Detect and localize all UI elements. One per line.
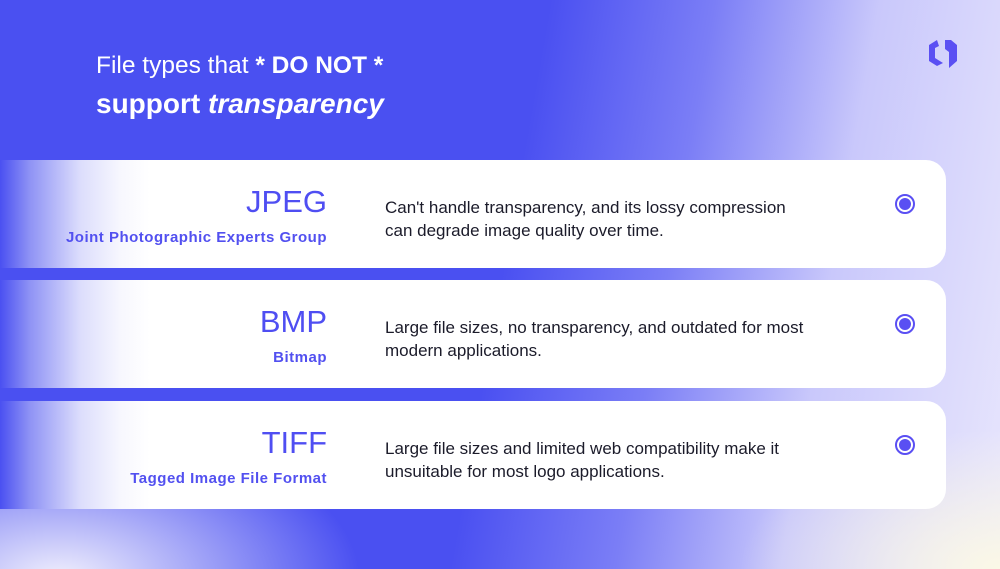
- heading: TIFF: TIFF: [262, 425, 327, 460]
- heading: BMP: BMP: [260, 304, 327, 339]
- icon: radio: [895, 314, 915, 334]
- text block: Large file sizes, no transparency, and outdated for most modern applications.: [385, 318, 803, 360]
- subtitle: Joint Photographic Experts Group: [66, 229, 327, 246]
- icon: radio: [895, 435, 915, 455]
- subtitle: Bitmap: [273, 349, 327, 366]
- text block: Can't handle transparency, and its lossy compression can degrade image quality over time.: [385, 198, 786, 240]
- panel: TIFF: [0, 401, 946, 509]
- panel: BMP: [0, 280, 946, 388]
- icon: radio: [895, 194, 915, 214]
- subtitle: Tagged Image File Format: [130, 470, 327, 487]
- title: [96, 52, 385, 119]
- title: File types that * DO NOT *: [96, 52, 383, 79]
- icon: logo: [929, 40, 957, 68]
- text block: Large file sizes and limited web compatibility make it unsuitable for most logo applications.: [385, 439, 779, 481]
- title: support transparency: [96, 88, 384, 119]
- heading: JPEG: JPEG: [246, 184, 327, 219]
- panel: JPEG: [0, 160, 946, 268]
